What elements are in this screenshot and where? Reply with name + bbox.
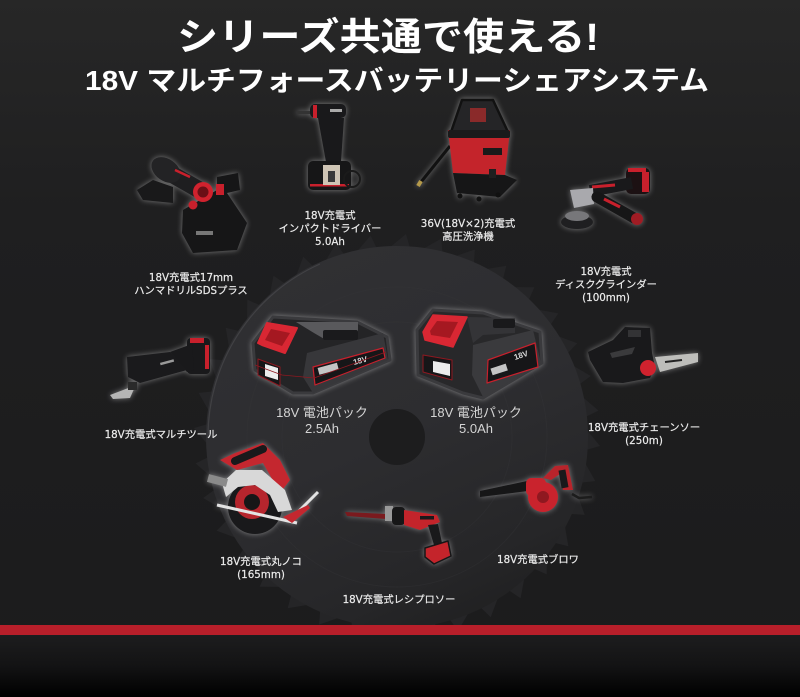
label: battery 2.5Ah: 18V 電池パック xyxy=(276,405,368,420)
label: pressure washer xyxy=(421,217,515,243)
label: chainsaw xyxy=(588,421,700,447)
label: impact driver: インパクトドライバー xyxy=(279,223,381,235)
label: blower: 18V充電式ブロワ xyxy=(497,553,579,566)
tool: disc grinder xyxy=(561,168,650,229)
label: chainsaw: 18V充電式チェーンソー xyxy=(588,421,700,434)
label: circular saw xyxy=(220,555,302,581)
subtitle: 18V マルチフォースバッテリーシェアシステム xyxy=(85,65,709,96)
tool: chainsaw xyxy=(588,327,698,383)
label: multi tool: 18V充電式マルチツール xyxy=(105,428,217,441)
label: pressure washer: 36V(18V×2)充電式 xyxy=(421,217,515,230)
label: disc grinder xyxy=(555,265,657,304)
label: disc grinder: (100mm) xyxy=(582,292,630,304)
label: reciprocating saw: 18V充電式レシプロソー xyxy=(343,593,455,606)
bottom dark band xyxy=(0,635,800,697)
label: hammer drill: 18V充電式17mm xyxy=(149,271,233,284)
tool: circular saw xyxy=(208,443,318,534)
label: pressure washer: 高圧洗浄機 xyxy=(442,230,494,243)
label: circular saw: (165mm) xyxy=(237,569,285,581)
tool: blower xyxy=(480,465,592,512)
battery: 2.5Ah xyxy=(253,317,390,393)
label: circular saw: 18V充電式丸ノコ xyxy=(220,555,302,568)
label: battery 5.0Ah: 18V 電池パック xyxy=(430,405,522,420)
red band xyxy=(0,625,800,635)
tool: hammer drill xyxy=(137,152,247,253)
label: battery 2.5Ah xyxy=(276,405,368,436)
label: hammer drill: ハンマドリルSDSプラス xyxy=(134,285,248,297)
tool: pressure washer xyxy=(418,100,517,202)
label: battery 5.0Ah: 5.0Ah xyxy=(459,421,493,436)
tool: impact driver xyxy=(297,104,360,190)
label: impact driver: 5.0Ah xyxy=(315,236,345,248)
label: disc grinder: 18V充電式 xyxy=(580,265,632,278)
label: impact driver: 18V充電式 xyxy=(304,209,356,222)
label: battery 2.5Ah: 2.5Ah xyxy=(305,421,339,436)
battery: 5.0Ah: 18V xyxy=(513,349,530,362)
label: hammer drill xyxy=(134,271,248,297)
label: disc grinder: ディスクグラインダー xyxy=(555,278,657,291)
tool: reciprocating saw xyxy=(345,506,451,564)
tool: multi tool xyxy=(110,338,210,399)
label: chainsaw: (250m) xyxy=(625,435,663,447)
battery: 5.0Ah xyxy=(417,310,542,398)
title: シリーズ共通で使える! xyxy=(177,16,599,59)
saw blade background xyxy=(194,234,600,640)
label: impact driver xyxy=(279,209,381,248)
battery: 2.5Ah: 18V xyxy=(352,354,369,367)
label: battery 5.0Ah xyxy=(430,405,522,436)
